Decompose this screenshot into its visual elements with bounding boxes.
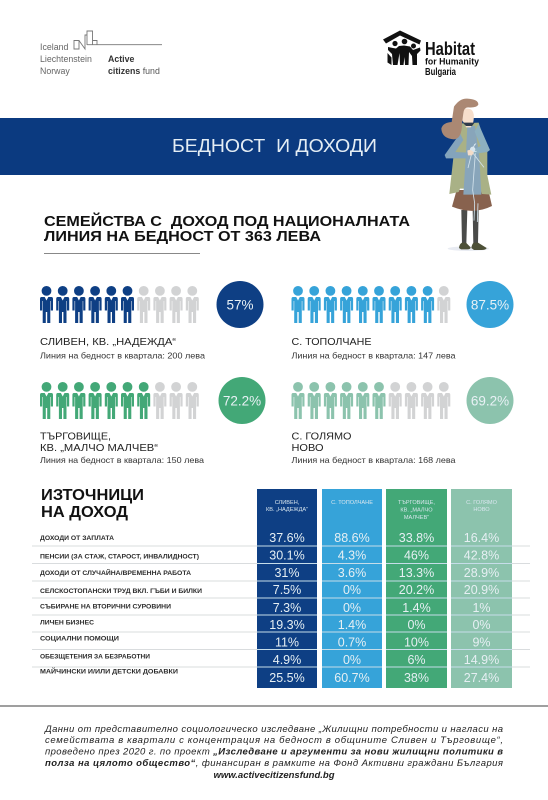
column: Sliven: 30.1% bbox=[269, 548, 305, 562]
column: Targovishte: 20.2% bbox=[399, 583, 434, 597]
row labels: СЪБИРАНЕ НА ВТОРИЧНИ СУРОВИНИ bbox=[40, 604, 171, 610]
pictogram: 87.5% bbox=[292, 286, 450, 323]
title: БЕДНОСТ И ДОХОДИ bbox=[172, 135, 377, 156]
column: Golyamo Novo: 0% bbox=[472, 618, 491, 632]
name: КВ. „МАЛЧО МАЛЧЕВ“ bbox=[40, 442, 159, 454]
row labels bbox=[40, 535, 202, 676]
heading: families below poverty line: ЛИНИЯ НА БЕДНОСТ ОТ 363 ЛЕВА bbox=[44, 229, 322, 245]
name: С. ТОПОЛЧАНЕ bbox=[292, 336, 372, 348]
column: Golyamo Novo: С. ГОЛЯМО bbox=[466, 500, 498, 506]
poverty line: Линия на бедност в квартала: 150 лева bbox=[40, 456, 204, 465]
column: Topolchane bbox=[322, 489, 382, 688]
column: Targovishte: 1.4% bbox=[402, 601, 431, 615]
heading: families below poverty line bbox=[44, 212, 411, 245]
row labels: ДОХОДИ ОТ ЗАПЛАТА bbox=[40, 535, 114, 542]
poverty line: Линия на бедност в квартала: 168 лева bbox=[292, 456, 456, 465]
column: Targovishte: 13.3% bbox=[399, 566, 434, 580]
percentage circle: 57% bbox=[226, 298, 254, 312]
logo: Active citizens fund: Active bbox=[108, 54, 135, 64]
column: Topolchane: 0% bbox=[343, 601, 361, 615]
percentage circle bbox=[466, 377, 514, 424]
footer: source note: www.activecitizensfund.bg bbox=[213, 770, 335, 781]
footer: source note: Данни от представително социологическо изследване „Жилищни потребности и нагласи на bbox=[44, 724, 503, 735]
percentage circle bbox=[218, 377, 266, 424]
column: Targovishte: 46% bbox=[404, 548, 429, 562]
column: Golyamo Novo: 20.9% bbox=[464, 583, 499, 597]
column: Golyamo Novo: 1% bbox=[472, 601, 491, 615]
column: Golyamo Novo: 16.4% bbox=[464, 531, 499, 545]
column: Topolchane: 88.6% bbox=[334, 531, 370, 545]
banner bbox=[0, 118, 548, 175]
column: Topolchane: 60.7% bbox=[334, 671, 370, 685]
name bbox=[40, 430, 159, 454]
panel: Golyamo Novo bbox=[292, 377, 514, 465]
footer: source note: полза на цялото общество“, финансиран в рамките на Фонд Активни граждани България bbox=[45, 758, 503, 769]
row labels: СОЦИАЛНИ ПОМОЩИ bbox=[40, 636, 119, 642]
column: Topolchane: 4.3% bbox=[338, 548, 366, 562]
column: Targovishte: 10% bbox=[404, 636, 429, 650]
heading: income sources: ИЗТОЧНИЦИ bbox=[41, 487, 144, 504]
column: Sliven: 7.3% bbox=[273, 601, 301, 615]
pictogram: 69.2% bbox=[292, 382, 450, 419]
column: Targovishte: ТЪРГОВИЩЕ, bbox=[398, 500, 435, 506]
column: Golyamo Novo: 9% bbox=[472, 636, 491, 650]
logo: Habitat for Humanity Bulgaria: Bulgaria bbox=[425, 66, 456, 78]
name: ТЪРГОВИЩЕ, bbox=[40, 430, 111, 442]
percentage circle bbox=[216, 281, 264, 328]
column: Sliven: КВ. „НАДЕЖДА“ bbox=[266, 507, 308, 513]
column: Targovishte: 33.8% bbox=[399, 531, 434, 545]
column: Sliven: 11% bbox=[275, 636, 299, 650]
footer: source note: проведено през 2020 г. по проект „Изследване и аргументи за нови жилищни политики в bbox=[45, 746, 503, 758]
column: Topolchane: 1.4% bbox=[338, 618, 366, 632]
column: Golyamo Novo: 14.9% bbox=[464, 653, 499, 667]
percentage circle: 69.2% bbox=[471, 394, 509, 408]
panel: Targovishte bbox=[40, 377, 266, 465]
name: НОВО bbox=[292, 442, 324, 454]
column: Sliven: 25.5% bbox=[269, 671, 305, 685]
column: Sliven: СЛИВЕН, bbox=[275, 500, 300, 506]
logo: Active citizens fund: Norway bbox=[40, 66, 70, 76]
column: Golyamo Novo: 27.4% bbox=[464, 671, 499, 685]
name: СЛИВЕН, КВ. „НАДЕЖДА“ bbox=[40, 336, 177, 348]
column: Targovishte: 6% bbox=[407, 653, 426, 667]
logo: Active citizens fund bbox=[40, 31, 162, 76]
column: Topolchane: 3.6% bbox=[338, 566, 366, 580]
logo: Habitat for Humanity Bulgaria: Habitat bbox=[425, 39, 475, 59]
heading: income sources bbox=[41, 487, 144, 521]
column: Sliven: 37.6% bbox=[269, 531, 305, 545]
illustration: woman with yarn bbox=[441, 99, 492, 251]
column: Topolchane: 0% bbox=[343, 583, 361, 597]
column: Targovishte: КВ. „МАЛЧО bbox=[400, 508, 433, 514]
pictogram: 57% bbox=[40, 286, 199, 323]
row labels: ДОХОДИ ОТ СЛУЧАЙНА/ВРЕМЕННА РАБОТА bbox=[40, 568, 191, 577]
column: Sliven: 7.5% bbox=[273, 583, 301, 597]
row labels: МАЙЧИНСКИ И/ИЛИ ДЕТСКИ ДОБАВКИ bbox=[40, 666, 178, 676]
logo: Habitat for Humanity Bulgaria bbox=[383, 30, 480, 78]
percentage circle bbox=[466, 281, 514, 328]
logo: Habitat for Humanity Bulgaria: for Humanity bbox=[425, 56, 480, 68]
column: Sliven bbox=[257, 489, 317, 688]
footer: source note: семействата в квартали с концентрация на бедност в общините Сливен и Търговище“, bbox=[45, 735, 503, 746]
percentage circle: 87.5% bbox=[471, 298, 509, 312]
panel: Sliven bbox=[40, 281, 264, 360]
row labels: ПЕНСИИ (ЗА СТАЖ, СТАРОСТ, ИНВАЛИДНОСТ) bbox=[40, 554, 199, 560]
column: Sliven: 4.9% bbox=[273, 653, 301, 667]
row labels: ЛИЧЕН БИЗНЕС bbox=[40, 620, 94, 626]
column: Topolchane: 0% bbox=[343, 653, 361, 667]
panel: Topolchane bbox=[292, 281, 514, 360]
column: Golyamo Novo: 42.8% bbox=[464, 548, 499, 562]
logo: Active citizens fund: citizens fund bbox=[108, 66, 160, 76]
column: Targovishte: МАЛЧЕВ“ bbox=[404, 515, 429, 521]
row labels: ОБЕЗЩЕТЕНИЯ ЗА БЕЗРАБОТНИ bbox=[40, 654, 150, 660]
column: Targovishte bbox=[386, 489, 447, 688]
heading: families below poverty line: СЕМЕЙСТВА С ДОХОД ПОД НАЦИОНАЛНАТА bbox=[44, 212, 411, 230]
column: Sliven: 31% bbox=[274, 566, 300, 580]
row labels: СЕЛСКОСТОПАНСКИ ТРУД ВКЛ. ГЪБИ И БИЛКИ bbox=[40, 588, 202, 595]
name: С. ГОЛЯМО bbox=[292, 430, 352, 442]
column: Golyamo Novo: 28.9% bbox=[464, 566, 499, 580]
column: Targovishte: 38% bbox=[404, 671, 429, 685]
heading: income sources: НА ДОХОД bbox=[41, 504, 128, 521]
name bbox=[292, 430, 352, 454]
column: Golyamo Novo: НОВО bbox=[473, 507, 490, 513]
column: Topolchane: 0.7% bbox=[338, 636, 366, 650]
logo: Active citizens fund: Iceland bbox=[40, 42, 68, 52]
poverty line: Линия на бедност в квартала: 200 лева bbox=[40, 352, 205, 360]
logo: Active citizens fund: Liechtenstein bbox=[40, 54, 92, 64]
column: Sliven: 19.3% bbox=[269, 618, 305, 632]
poverty line: Линия на бедност в квартала: 147 лева bbox=[292, 352, 456, 360]
percentage circle: 72.2% bbox=[223, 394, 261, 408]
column: Targovishte: 0% bbox=[407, 618, 426, 632]
pictogram: 72.2% bbox=[40, 382, 199, 419]
table: income sources bbox=[32, 489, 530, 688]
column: Topolchane: С. ТОПОЛЧАНЕ bbox=[331, 500, 373, 506]
footer: source note bbox=[44, 724, 503, 781]
column: Golyamo Novo bbox=[451, 489, 512, 688]
